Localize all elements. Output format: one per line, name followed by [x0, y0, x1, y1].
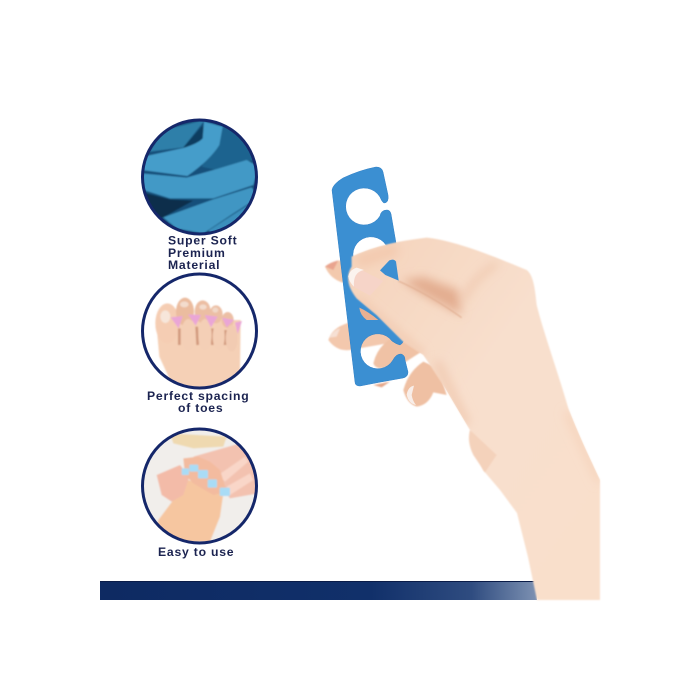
photo: hand holding toe separator [325, 167, 600, 600]
label: super soft premium material [168, 234, 237, 272]
label: perfect spacing of toes [147, 389, 249, 415]
icon: hands fitting separators on a foot [141, 428, 258, 544]
hand and forearm [348, 238, 600, 600]
label: super soft premium material: Premium [168, 246, 226, 260]
bottom gradient bar [100, 581, 537, 600]
little finger [403, 362, 447, 407]
icon: foam close-up [141, 118, 258, 236]
fingers behind the separator [325, 257, 422, 387]
label: perfect spacing of toes: Perfect spacing [147, 389, 249, 403]
label: easy to use: Easy to use [158, 545, 234, 559]
separator prong over index finger [380, 260, 399, 281]
label: perfect spacing of toes: of toes [178, 401, 223, 415]
panel: super soft material [141, 118, 258, 269]
panel: easy to use [141, 428, 258, 558]
label: super soft premium material: Super Soft [168, 234, 237, 248]
hand shading [353, 243, 600, 482]
palm and arm outline [348, 238, 600, 600]
label: super soft premium material: Material [168, 258, 220, 272]
icon: foot with pink separators [142, 274, 256, 391]
thumbnail [348, 268, 383, 296]
middle finger patch [359, 308, 378, 320]
little fingernail [407, 386, 416, 405]
panel: perfect spacing of toes [142, 274, 256, 415]
thumb crease [398, 281, 462, 318]
palm edge below wrist [469, 430, 497, 472]
infographic canvas [100, 118, 600, 600]
toe separator foam [332, 167, 408, 386]
